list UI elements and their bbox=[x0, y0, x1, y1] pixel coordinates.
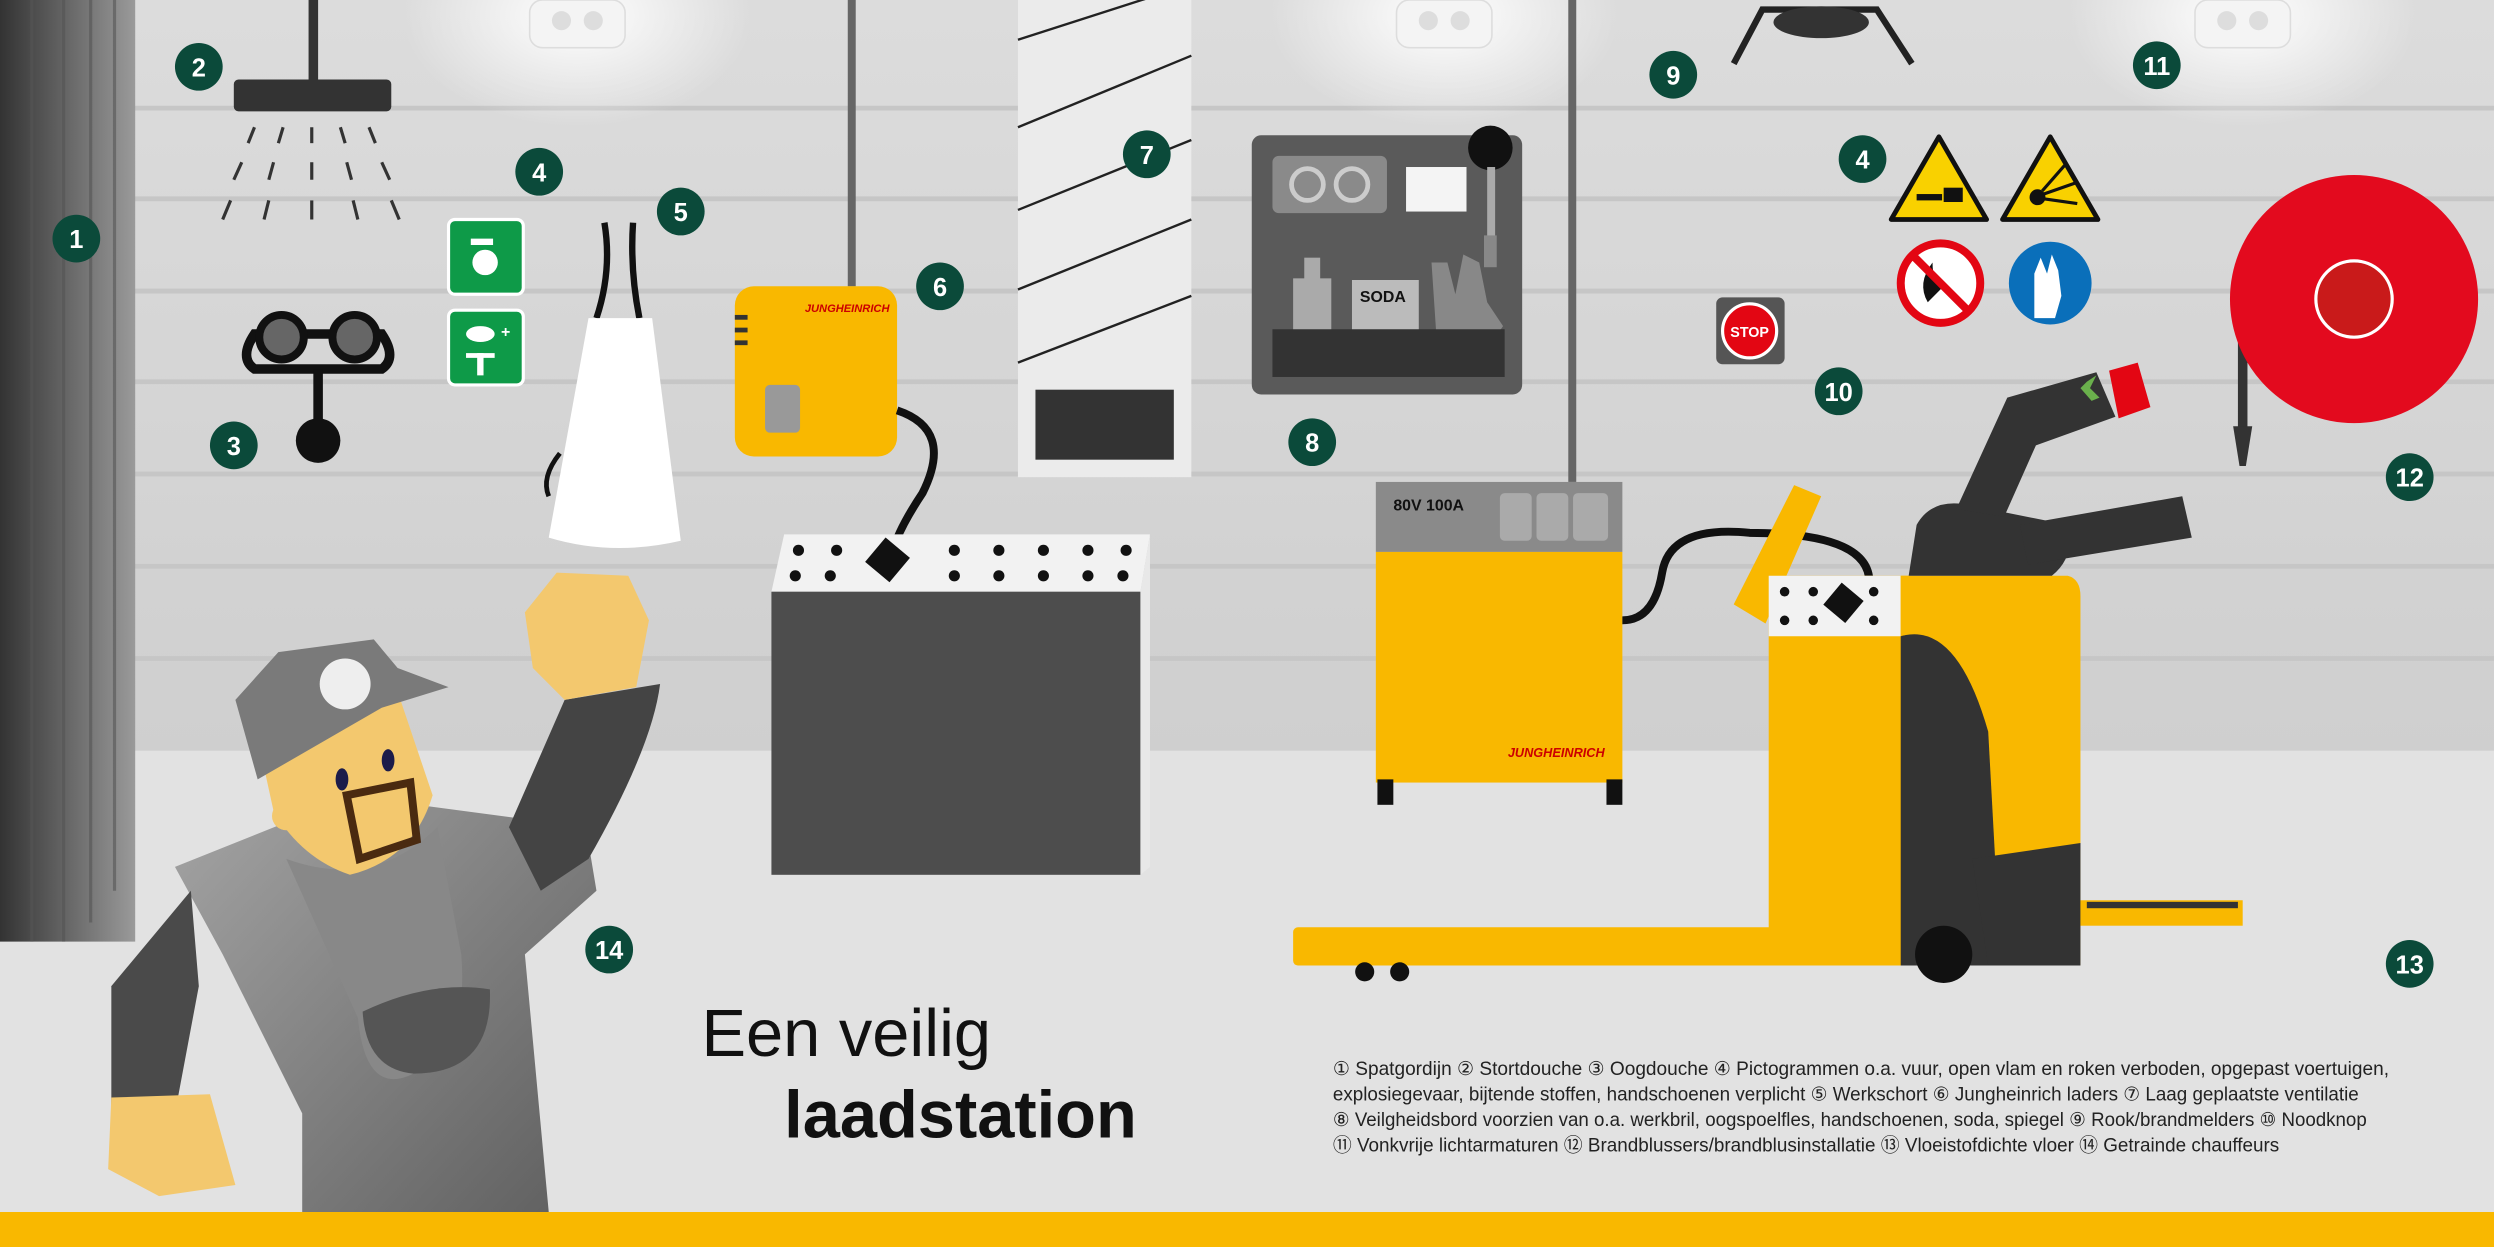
number badges: 13 bbox=[2396, 951, 2424, 979]
charger 2: 80V 100A bbox=[1393, 498, 1465, 515]
yellow band bbox=[0, 1212, 2494, 1247]
number badges: 2 bbox=[192, 54, 206, 82]
green signs bbox=[449, 219, 523, 385]
eye shower bbox=[247, 315, 390, 463]
forklift bbox=[1293, 363, 2243, 983]
green signs: + bbox=[501, 324, 510, 341]
apron bbox=[546, 223, 681, 548]
charger 2 bbox=[1376, 0, 1869, 805]
number badges: 11 bbox=[2143, 53, 2170, 81]
battery box bbox=[771, 534, 1150, 875]
legend: ⑧ Veilgheidsbord voorzien van o.a. werkbril, oogspoelfles, handschoenen, soda, spiegel ⑨ Rook/brandmelders ⑩ Noodknop bbox=[1333, 1110, 2367, 1131]
lights bbox=[402, 0, 752, 127]
safety board: SODA bbox=[1360, 289, 1406, 306]
smoke detector bbox=[1734, 6, 1912, 64]
title bbox=[701, 997, 1137, 1152]
number badges: 9 bbox=[1666, 62, 1680, 90]
number badges: 5 bbox=[674, 199, 688, 227]
title: Een veilig bbox=[701, 997, 991, 1071]
title: laadstation bbox=[784, 1078, 1137, 1152]
hazard signs bbox=[1891, 137, 2098, 324]
number badges: 14 bbox=[595, 937, 624, 965]
legend: explosiegevaar, bijtende stoffen, handschoenen verplicht ⑤ Werkschort ⑥ Jungheinrich laders ⑦ Laag geplaatste ventilatie bbox=[1333, 1085, 2359, 1106]
stop button bbox=[1716, 297, 1785, 364]
number badges: 1 bbox=[69, 226, 83, 254]
number badges: 6 bbox=[933, 274, 947, 302]
number badges: 4 bbox=[532, 159, 547, 187]
safety board bbox=[1252, 126, 1522, 394]
hose reel bbox=[2230, 175, 2478, 466]
charger 6 bbox=[735, 0, 934, 565]
charger 6: JUNGHEINRICH bbox=[805, 303, 890, 315]
number badges: 7 bbox=[1140, 142, 1154, 170]
number badges: 12 bbox=[2396, 465, 2424, 493]
number badges: 4 bbox=[1855, 147, 1870, 175]
wall bbox=[0, 0, 2494, 751]
stop button: STOP bbox=[1730, 325, 1769, 341]
charger 2: JUNGHEINRICH bbox=[1508, 745, 1605, 760]
number badges bbox=[52, 41, 2434, 988]
ventilation bbox=[1018, 0, 1191, 477]
number badges: 10 bbox=[1825, 379, 1853, 407]
legend bbox=[1333, 1059, 2389, 1157]
floor bbox=[0, 751, 2494, 1212]
shower bbox=[223, 0, 399, 219]
legend: ⑪ Vonkvrije lichtarmaturen ⑫ Brandblussers/brandblusinstallatie ⑬ Vloeistofdichte vloer ⑭ Getrainde chauffeurs bbox=[1333, 1135, 2279, 1157]
number badges: 3 bbox=[227, 433, 241, 461]
curtain bbox=[0, 0, 135, 942]
number badges: 8 bbox=[1305, 430, 1319, 458]
legend: ① Spatgordijn ② Stortdouche ③ Oogdouche ④ Pictogrammen o.a. vuur, open vlam en roken verboden, opgepast voertuigen, bbox=[1333, 1059, 2389, 1080]
worker bbox=[108, 573, 660, 1212]
